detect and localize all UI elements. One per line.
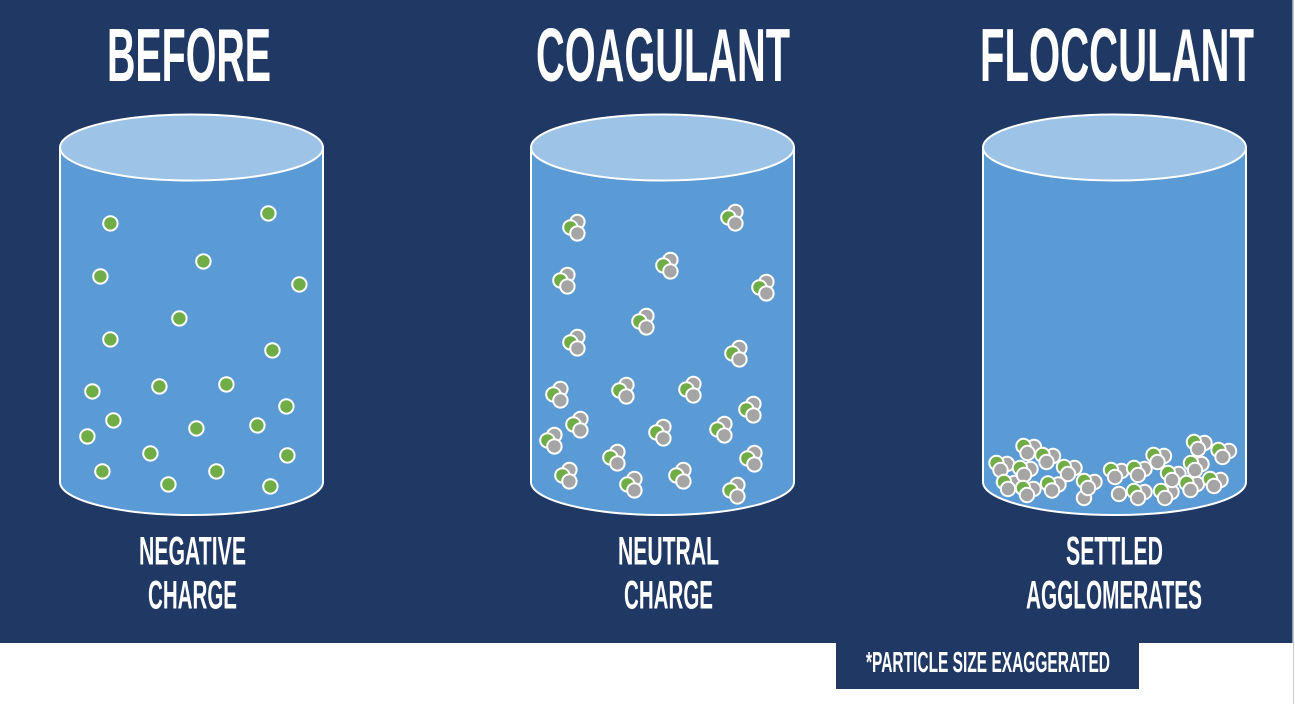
- label: negative charge: NEGATIVE: [139, 530, 246, 574]
- footnote banner: [836, 643, 1139, 689]
- title: before: BEFORE: [107, 13, 271, 97]
- cylinder: before: [60, 114, 323, 515]
- label: neutral charge: CHARGE: [624, 574, 713, 618]
- label: negative charge: [139, 530, 246, 618]
- label: neutral charge: [618, 530, 719, 618]
- label: neutral charge: NEUTRAL: [618, 530, 719, 574]
- label: settled agglomerates: SETTLED: [1066, 530, 1163, 574]
- cylinder: flocculant: [983, 114, 1246, 515]
- right edge line: [1293, 0, 1294, 704]
- label: settled agglomerates: [1026, 530, 1202, 618]
- particles: neutral clusters: [540, 205, 774, 504]
- title: coagulant: COAGULANT: [536, 13, 790, 97]
- particles: negative charge: [80, 206, 307, 494]
- particles: settled agglomerates: [989, 435, 1236, 505]
- label: negative charge: CHARGE: [148, 574, 237, 618]
- cylinder: coagulant: [531, 114, 794, 515]
